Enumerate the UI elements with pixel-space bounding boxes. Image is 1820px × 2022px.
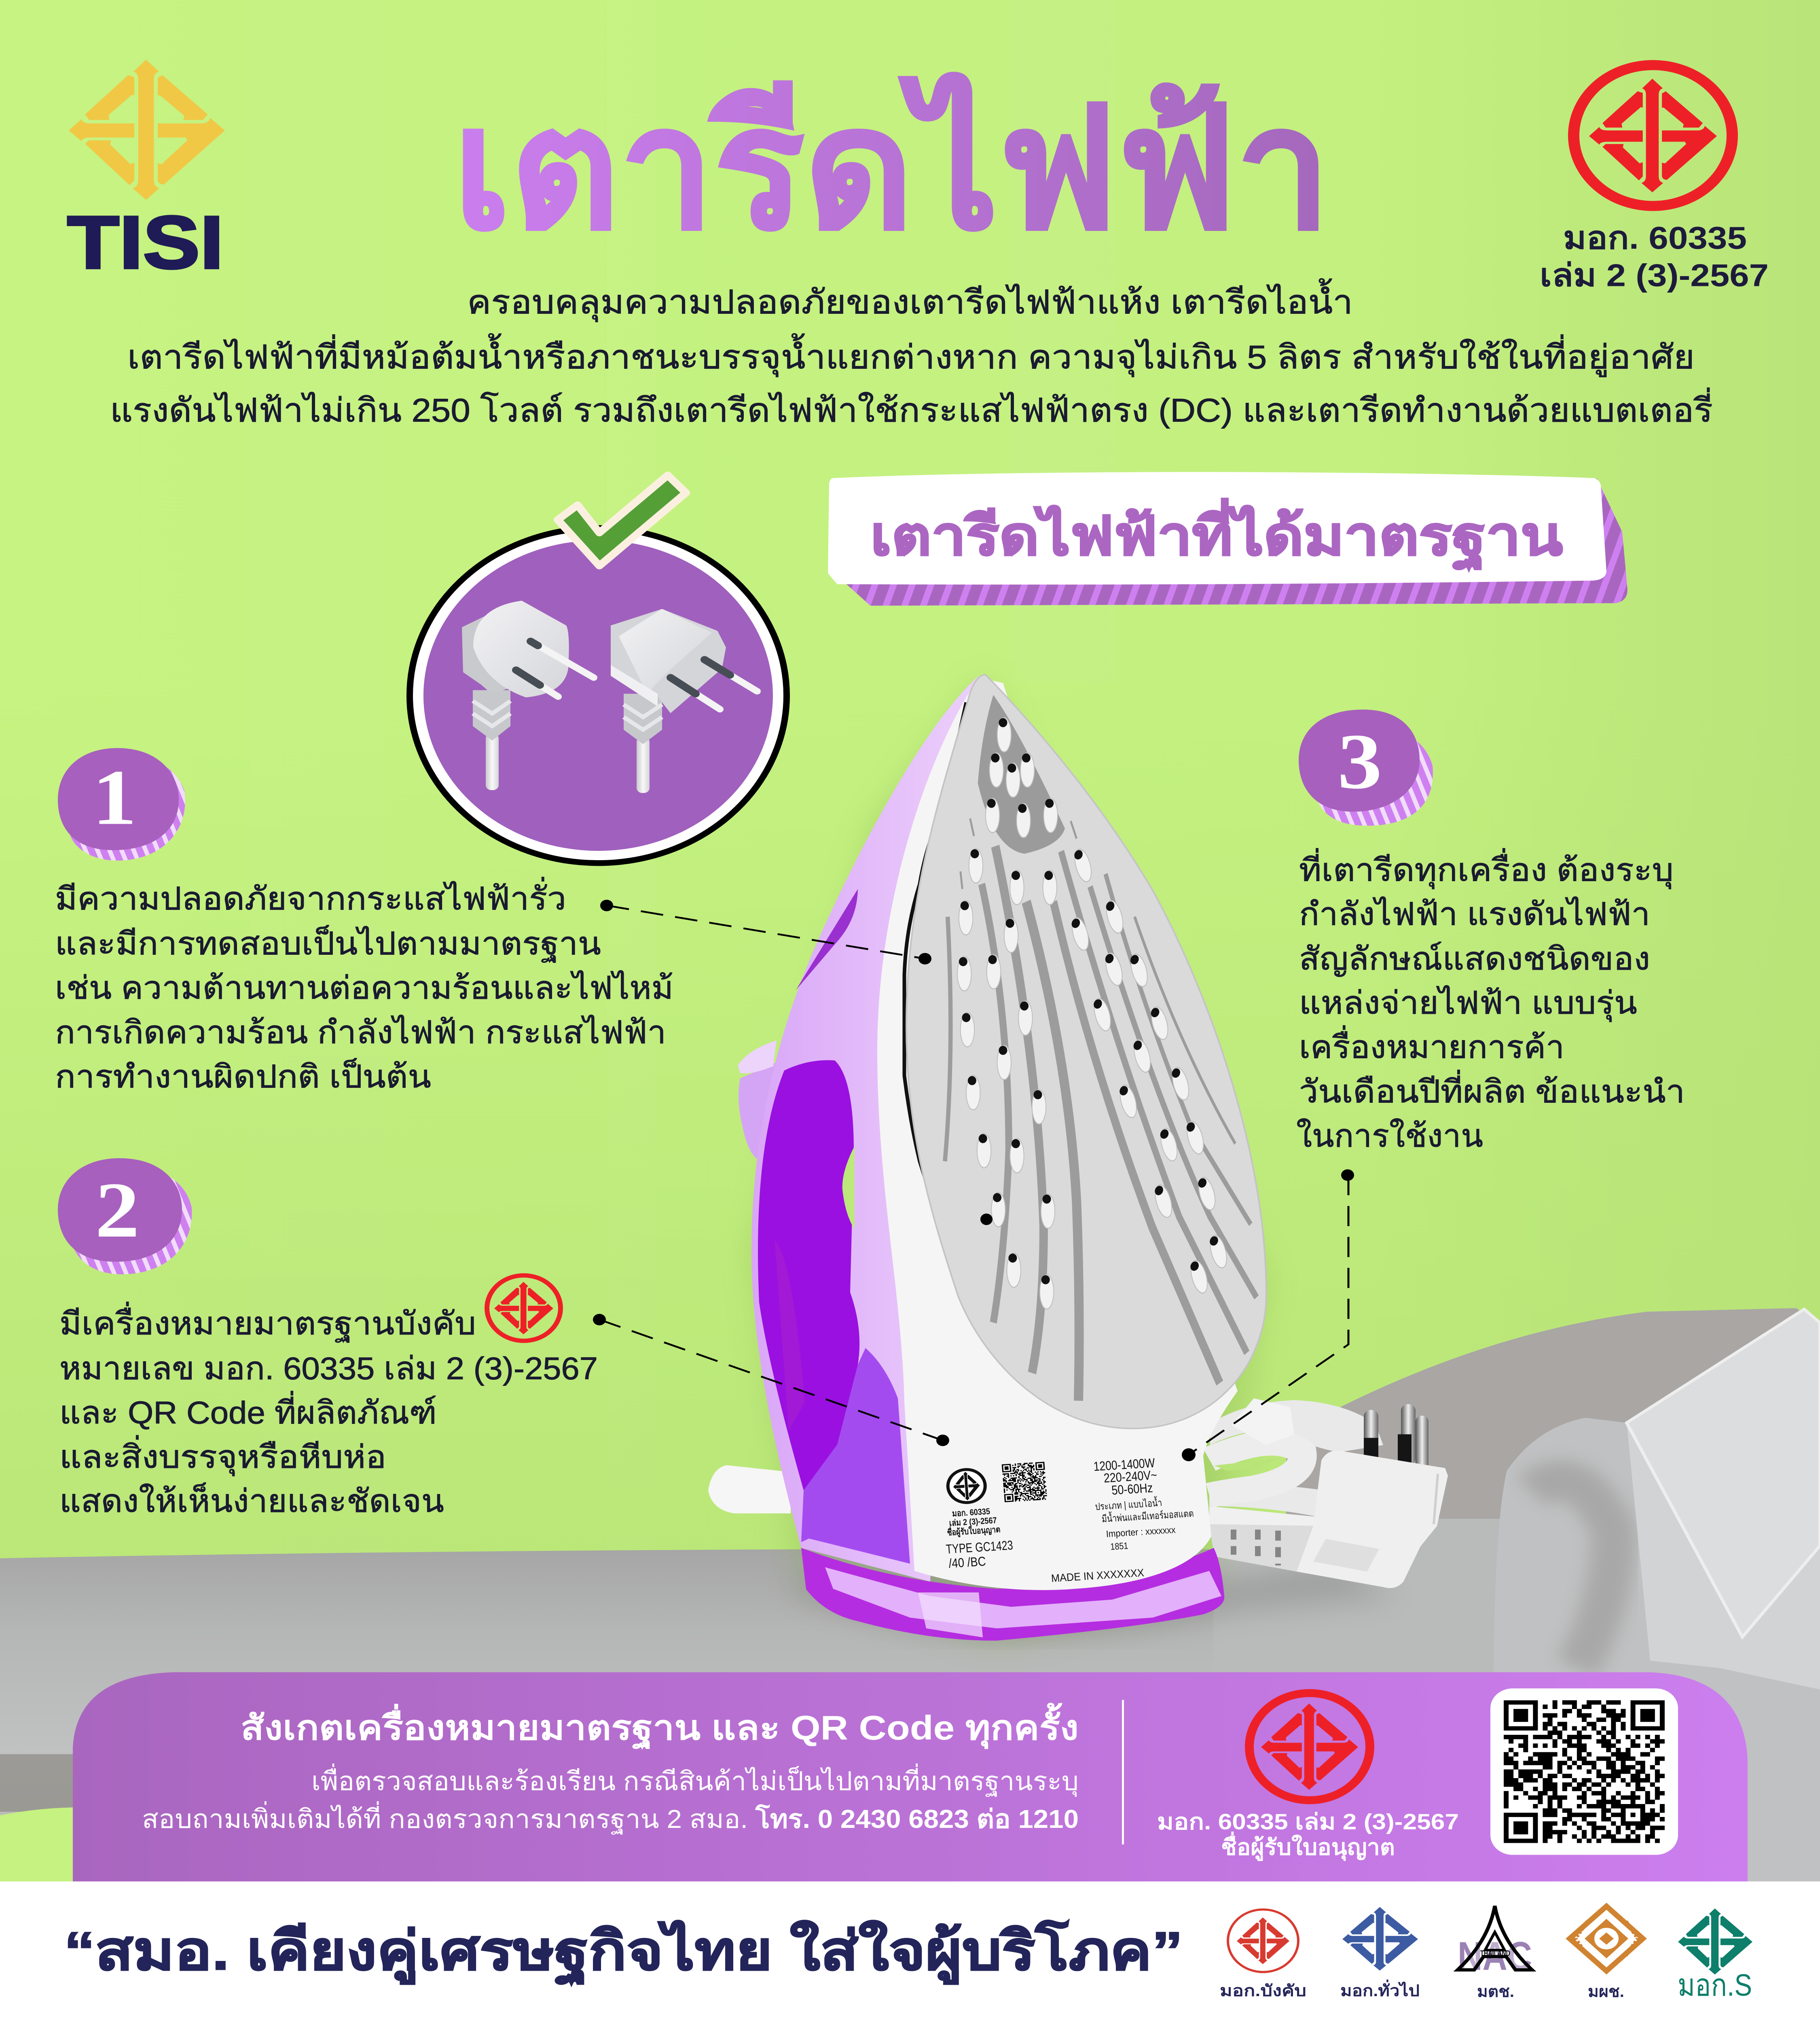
text block: item 3: ในการใช้งาน [1296,1118,1483,1153]
plug body [1297,1451,1448,1588]
soleplate [906,675,1266,1428]
footer logo: S mark [1678,1908,1752,2003]
heading banner: standard irons [828,472,1627,606]
panel: plug circle with two plugs and check mark [410,475,787,863]
background: folded shirt [1213,1308,1820,1884]
logo: TIS mandatory standard mark with number: มอก. 60335 [1563,220,1747,256]
label right text: มีน้ำพ่นและมีเทอร์มอสแตต [1101,1506,1194,1525]
text block: item 2: แสดงให้เห็นง่ายและชัดเจน [59,1482,444,1519]
badge: number 3: 3 [1337,718,1382,806]
heading banner: standard irons: เตารีดไฟฟ้าที่ได้มาตรฐาน [870,498,1563,571]
badge: number 2: 2 [95,1167,140,1254]
badge: number 1: 1 [92,754,137,842]
label right text: 1200-1400W [1093,1456,1155,1474]
badge: number 1 [58,748,185,861]
lavender housing [751,676,979,1582]
footer logo: NAC: มตช. [1477,1982,1514,2000]
text block: item 2: มีเครื่องหมายมาตรฐานบังคับ [59,1302,476,1343]
black gap line [904,702,966,1277]
label right text: 50-60Hz [1111,1481,1153,1497]
iron [708,675,1266,1641]
logo: TIS mandatory standard mark with number: เล่ม 2 (3)-2567 [1540,258,1769,293]
badge: number 2 [58,1158,192,1274]
label right text: Importer : xxxxxxx [1106,1525,1176,1540]
panel body text [142,1764,1079,1835]
cord boot [708,1465,791,1513]
text block: item 1: การทำงานผิดปกติ เป็นต้น [55,1058,431,1094]
braided cord [1209,1400,1383,1521]
footer logo: NAC: NAC [1458,1934,1532,1979]
label right text: ประเภท | แบบไอน้ำ [1094,1496,1162,1512]
panel standard caption: ชื่อผู้รับใบอนุญาต [1221,1832,1395,1861]
text block: item 2 [59,1302,598,1519]
label right text: MADE IN XXXXXXX [1051,1567,1145,1585]
handle hole [842,1146,855,1229]
footer logo: general [1340,1907,1420,1999]
panel heading: สังเกตเครื่องหมายมาตรฐาน และ QR Code ทุกครั้ง [241,1703,1079,1750]
icon: grounded plug [611,609,757,793]
deep purple handle interior [758,1060,859,1490]
logo: TIS mandatory standard mark with number [1540,65,1769,293]
label right text: 220-240V~ [1103,1468,1158,1485]
panel standard caption [1157,1810,1459,1861]
callout dot on soleplate [980,1214,993,1225]
logo: TISI yellow mark and wordmark: TISI [67,201,224,284]
white body [877,678,1238,1590]
footer logo: NAC [1458,1906,1532,2000]
panel: report info [73,1672,1748,1881]
iron rating label [940,1453,1199,1591]
panel body text: สอบถามเพิ่มเติมได้ที่ กองตรวจการมาตรฐาน 2 สมอ. โทร. 0 2430 6823 ต่อ 1210 [142,1801,1079,1835]
text block: item 3: เครื่องหมายการค้า [1299,1025,1564,1065]
intro text block: เตารีดไฟฟ้าที่มีหม้อต้มน้ำหรือภาชนะบรรจุน้ำแยกต่างหาก ความจุไม่เกิน 5 ลิตร สำหรับใช้ในที่อยู่อาศัย [127,334,1695,377]
strain relief [1209,1524,1327,1571]
text block: item 2: และสิ่งบรรจุหรือหีบห่อ [59,1435,386,1476]
soleplate grooves and steam holes [945,695,1257,1401]
footer logo: NAC: THAILAND [1480,1949,1510,1958]
text block: item 2: หมายเลข มอก. 60335 เล่ม 2 (3)-2567 [59,1351,598,1386]
intro text block: ครอบคลุมความปลอดภัยของเตารีดไฟฟ้าแห้ง เตารีดไอน้ำ [467,279,1353,322]
label left text: ชื่อผู้รับใบอนุญาต [946,1523,1001,1538]
title: เตารีดไฟฟ้า [453,72,1331,263]
panel standard caption: มอก. 60335 เล่ม 2 (3)-2567 [1157,1810,1459,1834]
text block: item 1: การเกิดความร้อน กำลังไฟฟ้า กระแสไฟฟ้า [55,1015,666,1050]
label right text: 1851 [1110,1541,1128,1552]
icon: inline mandatory standard mark [487,1275,561,1341]
footer logo: community product [1570,1906,1643,2000]
footer logo: community product: มผช. [1588,1982,1624,2000]
text block: item 1: และมีการทดสอบเป็นไปตามมาตรฐาน [55,925,601,963]
label mark [947,1468,986,1504]
text block: item 1: เช่น ความต้านทานต่อความร้อนและไฟไหม้ [55,970,673,1005]
footer slogan: “สมอ. เคียงคู่เศรษฐกิจไทย ใส่ใจผู้บริโภค” [64,1920,1183,1986]
label left text [943,1505,1015,1571]
text block: item 1: มีความปลอดภัยจากกระแสไฟฟ้ารั่ว [55,877,566,916]
logo: TISI yellow mark and wordmark [67,60,225,284]
callout line: item 1 [600,900,931,964]
white cable strip [1209,1506,1318,1528]
label left text: มอก. 60335 [952,1506,990,1519]
icon: round plug [462,601,594,790]
callout line: item 2 [593,1314,949,1446]
label left text: เล่ม 2 (3)-2567 [949,1515,997,1528]
badge: number 3 [1299,710,1433,826]
text block: item 3: สัญลักษณ์แสดงชนิดของ [1299,941,1650,977]
iron cord and plug [1209,1398,1448,1588]
plug pins [1364,1410,1378,1471]
label QR code [1002,1462,1047,1502]
text block: item 3: วันเดือนปีที่ผลิต ข้อแนะนำ [1299,1070,1685,1109]
panel QR code [1490,1688,1678,1855]
footer logo: mandatory [1220,1910,1306,1999]
text block: item 3 [1296,848,1685,1153]
footer logo: general: มอก.ทั่วไป [1340,1980,1420,1999]
intro text block: แรงดันไฟฟ้าไม่เกิน 250 โวลต์ รวมถึงเตารีดไฟฟ้าใช้กระแสไฟฟ้าตรง (DC) และเตารีดทำงานด้วยแบตเตอรี่ [110,387,1713,429]
soft shadow around iron [751,675,1266,1646]
footer band [0,1881,1820,2022]
intro text block [110,279,1713,429]
text block: item 3: กำลังไฟฟ้า แรงดันไฟฟ้า [1299,897,1650,932]
text block: item 3: แหล่งจ่ายไฟฟ้า แบบรุ่น [1299,985,1637,1022]
callout line: item 3 [1182,1170,1354,1461]
panel standard mark [1249,1693,1370,1800]
label left text: TYPE GC1423 [946,1538,1014,1557]
text block: item 1 [55,877,673,1094]
footer logo: S mark: มอก.S [1678,1968,1752,2003]
text block: item 2: และ QR Code ที่ผลิตภัณฑ์ [59,1391,437,1430]
icon: green check mark [558,475,686,566]
rear button [739,1060,781,1161]
footer logo: mandatory: มอก.บังคับ [1220,1982,1306,1999]
text block: item 3: ที่เตารีดทุกเครื่อง ต้องระบุ [1299,848,1674,889]
label left text: /40 /BC [948,1554,986,1571]
water tank base [801,1548,1224,1641]
medium violet lower body [801,1348,910,1564]
panel body text: เพื่อตรวจสอบและร้องเรียน กรณีสินค้าไม่เป็นไปตามที่มาตรฐานระบุ [311,1764,1079,1797]
background: ironing board fabric [0,1549,1820,1884]
label right text [1042,1453,1199,1585]
shadow under iron and plug on the fabric [789,1560,1395,1635]
